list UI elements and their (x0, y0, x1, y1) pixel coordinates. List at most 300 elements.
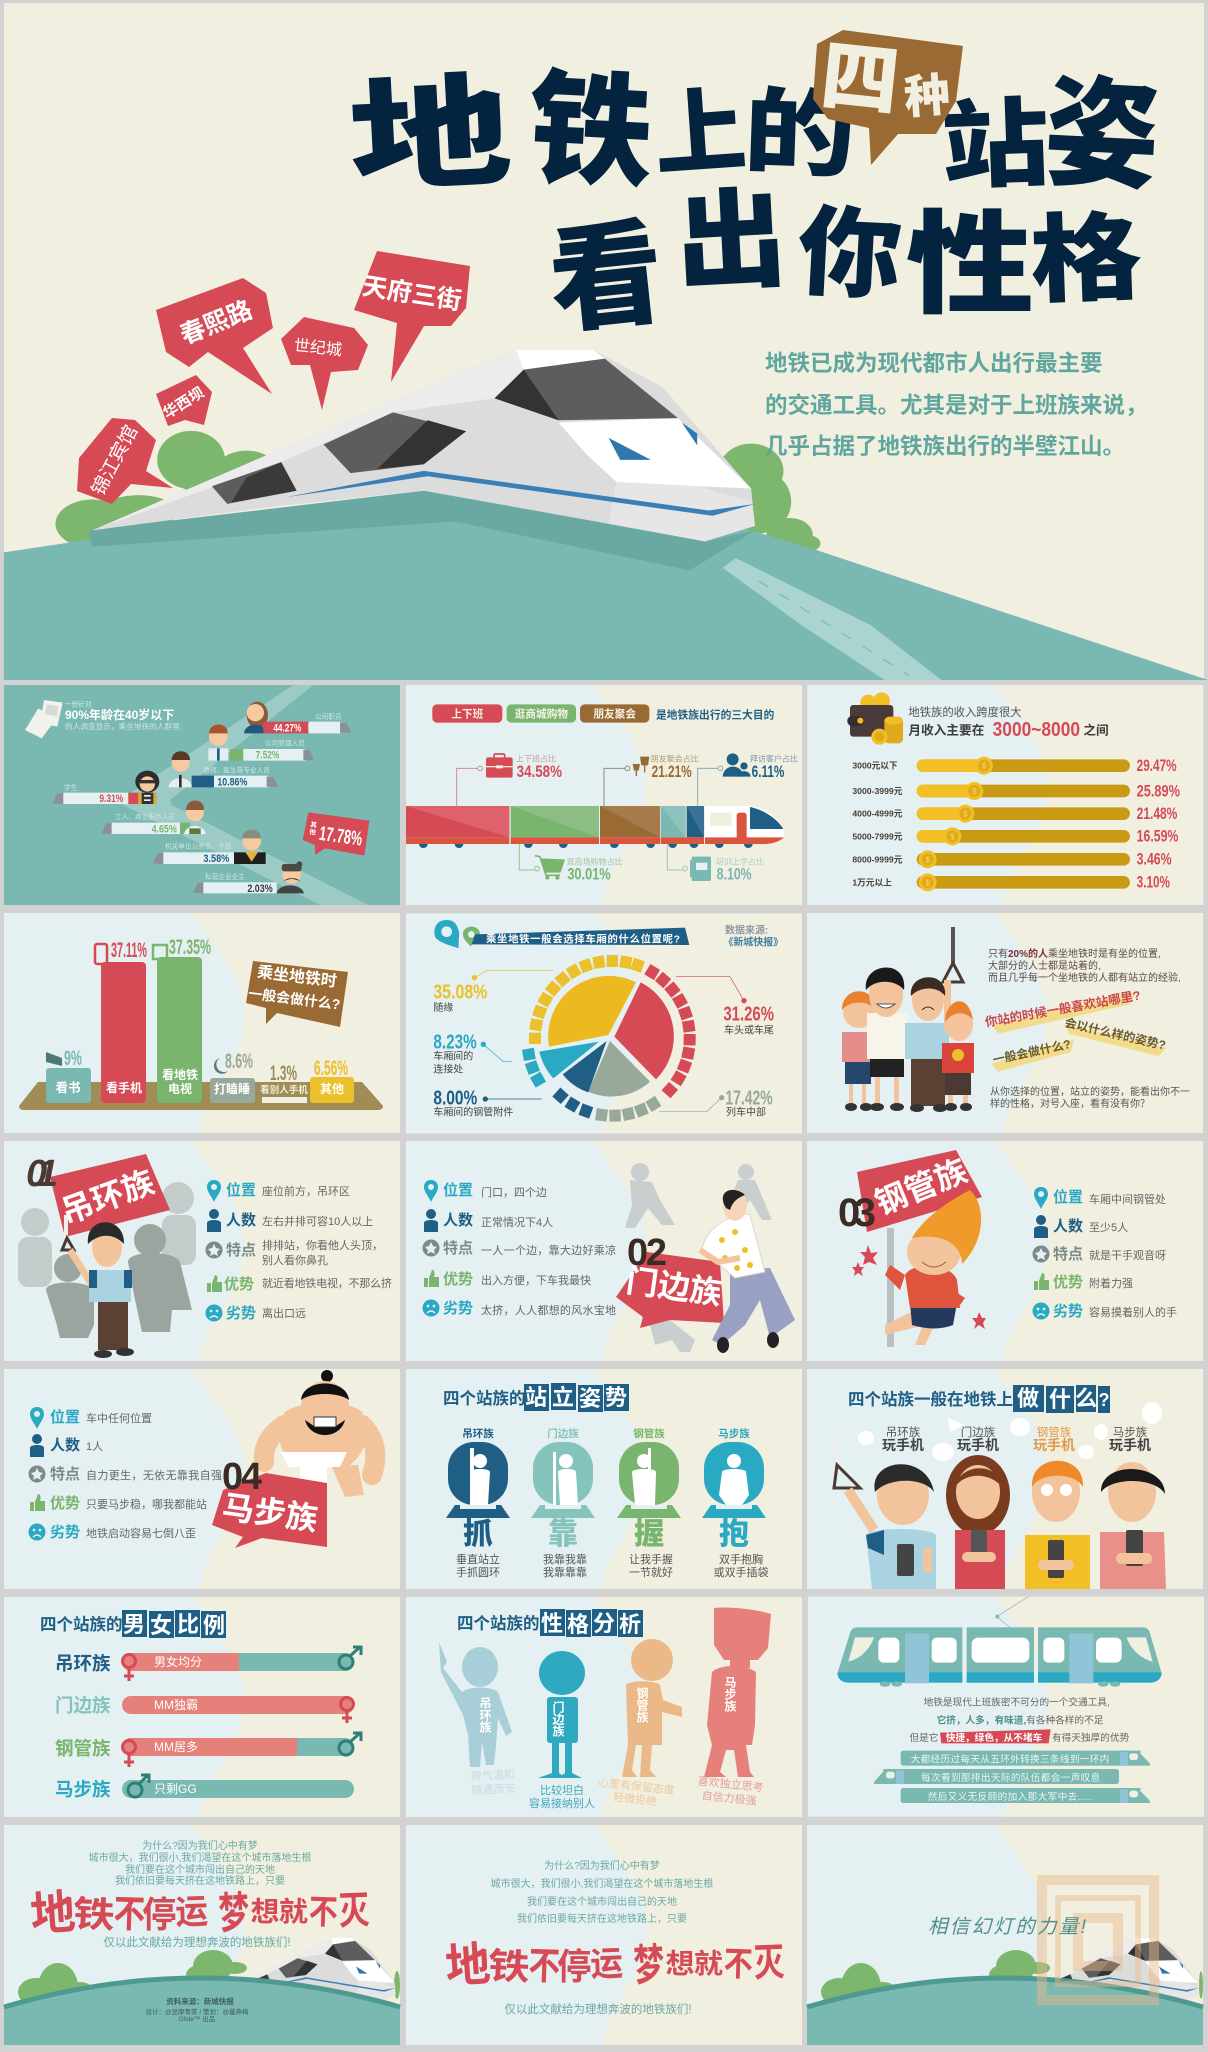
man holding strap (62, 1215, 134, 1358)
info: 劣势: 离出口远 (262, 1306, 306, 1320)
gray silhouettes (625, 1163, 772, 1352)
heading: 格 (567, 1612, 589, 1637)
bar: 其他: 其他 (320, 1081, 344, 1096)
info: 特点: 排排站，你看他人头顶， (262, 1238, 383, 1252)
stat: 培训上学: 培训上学占比 (716, 856, 764, 866)
callout: 乘坐地铁时: 乘坐地铁时 (256, 963, 338, 991)
slogan: 地 (28, 1875, 77, 1945)
row: 工人、商业服务人员: 工人、商业服务人员 (115, 812, 175, 821)
info: 优势 (207, 1275, 392, 1293)
bubble: 华西坝 (156, 375, 212, 426)
slogan: 就 (279, 1890, 308, 1930)
boy on pole (885, 1190, 981, 1345)
slogan: 梦 (217, 1877, 251, 1942)
callout: 乘坐地铁时: 一般会做什么? (247, 985, 341, 1012)
stat: 培训上学: 8.10% (717, 864, 752, 883)
verse text: 为什么?因为我们心中有梦 (544, 1859, 660, 1872)
title: 格 (1027, 180, 1144, 323)
info: 人数 (30, 1434, 103, 1457)
info: 位置 (207, 1180, 350, 1202)
info: 优势: 优势 (1053, 1274, 1083, 1291)
label: 连接处 (433, 1032, 512, 1076)
bar: 看地铁电视: 看地铁 (162, 1067, 198, 1082)
bar: 看地铁电视: 37.35% (169, 936, 211, 959)
info: 人数: 人数 (50, 1437, 80, 1454)
title: 地 (344, 33, 515, 217)
row: 学生: 学生 (64, 783, 78, 792)
summary text: 有得天独厚的优势 (1052, 1732, 1130, 1744)
silhouette: 门边族 (538, 1651, 585, 1778)
bar: 看书: 9% (64, 1047, 82, 1070)
heading: 地铁族的收入跨度很大 (908, 705, 1022, 719)
callout: 其他 17.78%: 其 (310, 822, 317, 830)
panel: standing postures (406, 1369, 802, 1589)
info: 劣势: 劣势 (443, 1300, 473, 1317)
heading pills: 逛商城购物 (515, 708, 568, 721)
info: 人数: 1人 (86, 1440, 103, 1453)
callout: 其他 17.78%: 17.78% (318, 823, 364, 851)
labels: 玩手机 (957, 1437, 999, 1453)
info: 优势: 优势 (443, 1271, 473, 1288)
bar: 5000-7999元: 5000-7999元 (852, 831, 903, 841)
heading: 立 (552, 1385, 574, 1410)
row: 公司职员: 公司职员 (315, 713, 342, 721)
panel: 吊环族 (4, 1141, 400, 1361)
bar: 看手机 (95, 939, 147, 1103)
intro text: 90%年龄在40岁以下 (65, 707, 174, 722)
gray crowd silhouettes (18, 1182, 196, 1338)
stat: 朋友聚会: 朋友聚会占比 (651, 754, 699, 764)
info: 位置: 车厢中间钢管处 (1089, 1192, 1166, 1206)
label: 连接处: 8.23% (433, 1032, 477, 1054)
bar: 1万元以上 (852, 873, 1170, 892)
heading: 么 (1075, 1386, 1097, 1411)
title (344, 27, 1164, 356)
mini train 3: 然后又义无反顾的加入那大军中去..... (928, 1791, 1092, 1803)
info: 特点: 就是干手观音呀 (1089, 1248, 1166, 1262)
tag: 马步族: 马步族 (220, 1488, 320, 1538)
info: 人数: 正常情况下4人 (481, 1216, 553, 1229)
tag: 钢管族: 03 (838, 1191, 876, 1235)
info: 劣势 (28, 1524, 196, 1541)
label: 钢管附件: 8.00% (433, 1087, 478, 1109)
info: 特点: 特点 (50, 1465, 80, 1483)
info: 优势: 优势 (224, 1276, 254, 1293)
person 4 (1100, 1462, 1166, 1589)
info: 位置: 位置 (50, 1408, 80, 1426)
column: 抱: 抱 (719, 1518, 749, 1551)
mini train 3 (901, 1788, 1150, 1803)
slogan: 想 (666, 1942, 694, 1982)
bar: 3000-3999元: $ (972, 787, 977, 796)
caption: 门边族: 比较坦白 (540, 1783, 584, 1797)
column: 靠: 我靠我靠 (543, 1552, 587, 1566)
icon: briefcase (486, 754, 513, 778)
column: 抓: 手抓圆环 (456, 1565, 500, 1579)
info list (422, 1180, 616, 1317)
bubble: 天府三街: 天府三街 (360, 272, 463, 316)
credits: 资料来源：新城快报 (166, 1996, 234, 2006)
data source (723, 923, 783, 949)
trees (821, 1950, 1203, 2011)
bar: 4000-4999元: 21.48% (1137, 805, 1178, 823)
tag: 吊环族: 01 (26, 1153, 58, 1195)
bar: 8000-9999元: 8000-9999元 (852, 854, 903, 864)
panel: income (807, 685, 1203, 905)
info: 特点: 特点 (443, 1239, 473, 1257)
heading pills: 朋友聚会 (593, 708, 636, 721)
verse text: 城市很大，我们很小,我们渴望在这个城市落地生根 (89, 1851, 311, 1864)
callout: 其他 17.78%: 他 (309, 827, 317, 837)
row: 门边族 (55, 1695, 354, 1723)
column: 抱 (702, 1427, 768, 1579)
panel: 钢管族 (807, 1141, 1203, 1361)
panel: 门边族 (406, 1141, 802, 1361)
heading (457, 1609, 643, 1637)
bar: 3000元以下: $ (982, 762, 987, 771)
labels (882, 1425, 1151, 1453)
column: 靠 (531, 1427, 595, 1579)
bar: 1万元以上: $ (925, 878, 930, 887)
verse text: 我们要在这个城市闯出自己的天地 (125, 1863, 275, 1876)
row: 钢管族: MM居多 (154, 1740, 198, 1754)
icon: notebook (690, 857, 711, 881)
heading: ? (1098, 1390, 1110, 1410)
label: 随缘 (433, 971, 553, 1014)
info: 特点 (422, 1239, 616, 1257)
panel: 马步族 (4, 1369, 400, 1589)
label: 随缘: 35.08% (433, 982, 488, 1004)
row: 钢管族 (55, 1733, 361, 1767)
slogan: 铁 (487, 1937, 531, 1991)
info: 优势 (424, 1270, 591, 1288)
row: 钢管族: 钢管族 (55, 1738, 111, 1759)
train (216, 1938, 396, 2000)
column: 抱: 马步族 (718, 1427, 750, 1440)
tag: 吊环族: 吊环族 (56, 1164, 159, 1230)
info list (206, 1180, 392, 1322)
heading: 四个站族一般在地铁上 (848, 1389, 1013, 1409)
column: 抓: 吊环族 (462, 1427, 494, 1440)
bubble: 世纪城: 世纪城 (293, 337, 343, 359)
info: 特点 (206, 1238, 383, 1267)
bar: 3000-3999元 (852, 782, 1180, 800)
bar: 打瞌睡: 8.6% (225, 1050, 253, 1073)
hero illustration: train on hill (4, 350, 1208, 680)
row: 马步族: 只剩GG (154, 1782, 197, 1796)
heading: 分 (593, 1611, 615, 1636)
column: 握: 握 (634, 1518, 664, 1551)
stat: 拜访客户 (750, 754, 798, 781)
info: 劣势 (1032, 1302, 1177, 1320)
info: 位置: 位置 (226, 1181, 256, 1199)
label: 列车中部 (659, 1088, 773, 1119)
caption: 吊环族: 脾气温和 (470, 1767, 515, 1783)
heading: 析 (619, 1612, 641, 1637)
tag: 马步族 (212, 1456, 327, 1548)
row: 马步族 (55, 1775, 354, 1800)
heading: 例 (203, 1613, 225, 1638)
heading: 四个站族的 (457, 1613, 540, 1633)
bubble: 春熙路 (156, 278, 273, 394)
column: 握: 钢管族 (633, 1427, 665, 1440)
bar: 8000-9999元 (852, 850, 1172, 869)
summary text: 但是它 (910, 1732, 938, 1744)
row: 公司管理人员: 7.52% (256, 750, 279, 762)
slogan: 不 (113, 1883, 146, 1940)
slogan: 不 (308, 1884, 339, 1935)
hill (4, 1978, 400, 2045)
label: 钢管附件: 车厢间的钢管附件 (433, 1105, 513, 1118)
info: 特点: 自力更生，无依无靠我自强 (86, 1468, 222, 1482)
bubble: 锦江宾馆 (77, 418, 173, 504)
text: intro: 大部分的人士都是站着的, (988, 959, 1101, 972)
label: 车头或车尾: 31.26% (723, 1003, 774, 1025)
info: 劣势: 劣势 (50, 1524, 80, 1541)
question: 姿势: 会以什么样的姿势? (1063, 1015, 1167, 1052)
labels: 门边族 (961, 1425, 996, 1439)
row: 门边族: 门边族 (55, 1695, 111, 1716)
pie chart (539, 976, 674, 1097)
slogan: 梦 (632, 1929, 666, 1994)
slogan: 运 (589, 1935, 624, 1986)
labels: 玩手机 (1033, 1437, 1075, 1453)
intro text (65, 700, 182, 731)
bubble: 天府三街 (354, 251, 470, 382)
row: 吊环族 (55, 1647, 361, 1681)
column: 抓: 垂直站立 (456, 1552, 500, 1566)
bar: 看别人手机: 1.3% (270, 1062, 297, 1085)
caption: 马步族: 自信力极强 (701, 1788, 757, 1808)
slogan (28, 1875, 370, 1945)
title: 看 (540, 180, 671, 356)
info: 位置 (424, 1180, 547, 1202)
info: 优势: 优势 (50, 1495, 80, 1512)
silhouette: 马步族 (704, 1607, 771, 1777)
hero intro text: 地铁已成为现代都市人出行最主要 (765, 350, 1103, 376)
stat: 上下班 (516, 754, 562, 781)
intro text: 的人调查显示，乘坐地铁的人群里: (65, 721, 182, 731)
labels: 吊环族 (886, 1425, 921, 1439)
panel: carriage position pie (406, 913, 802, 1133)
info: 优势 (1034, 1273, 1133, 1291)
text: closing: 从你选择的位置，站立的姿势，能看出你不一 (990, 1085, 1190, 1098)
info: 位置: 位置 (443, 1181, 473, 1199)
callout: 乘坐地铁时 (246, 961, 348, 1027)
icon: map pins (434, 920, 480, 948)
info: 位置: 门口，四个边 (481, 1185, 547, 1199)
bubble: 锦江宾馆: 锦江宾馆 (87, 422, 142, 499)
data source: 《新城快报》 (723, 936, 783, 949)
verse text: 我们依旧要每天挤在这地铁路上，只要 (115, 1874, 285, 1887)
row: 门边族: MM独霸 (154, 1698, 198, 1712)
slogan: 不 (723, 1936, 754, 1987)
column: 抓 (446, 1427, 510, 1579)
silhouette: 吊环族 (439, 1642, 512, 1767)
intro text: 一份针对 (65, 700, 92, 709)
tag: 吊环族 (26, 1153, 170, 1237)
title: 的 (742, 56, 859, 196)
person 3 orange hair (1025, 1461, 1090, 1589)
bubble: 四种: 种 (902, 68, 952, 124)
bar: 4000-4999元: 4000-4999元 (852, 809, 903, 819)
silhouette: 马步族: 马步族 (723, 1676, 737, 1713)
info: 劣势: 太挤，人人都想的风水宝地 (481, 1303, 616, 1317)
info: 特点: 特点 (1053, 1245, 1083, 1263)
label: 车头或车尾 (676, 977, 774, 1036)
info list (28, 1407, 222, 1541)
title: 姿 (1041, 34, 1164, 214)
title: 性 (906, 173, 1034, 336)
info: 劣势: 劣势 (226, 1305, 256, 1322)
heading: 男 (123, 1612, 145, 1637)
train (1019, 1938, 1199, 2000)
pantograph (996, 1597, 1028, 1627)
info: 劣势: 地铁启动容易七倒八歪 (86, 1526, 196, 1540)
bar: 看书: 看书 (55, 1080, 81, 1095)
info: 位置: 位置 (1053, 1188, 1083, 1206)
panel: hero (4, 3, 1208, 680)
info: 特点: 一人一个边，靠大边好乘凉 (481, 1243, 616, 1257)
summary text: 快捷，绿色，从不堵车 (946, 1732, 1043, 1744)
heading (40, 1610, 226, 1638)
info: 位置: 车中任何位置 (86, 1411, 152, 1425)
pole (887, 1228, 894, 1347)
row: 吊环族: 男女均分 (154, 1654, 202, 1669)
row: 私营企业业主: 2.03% (247, 883, 273, 895)
info: 人数: 左右并排可容10人以上 (262, 1214, 373, 1228)
heading: 四个站族的 (40, 1614, 122, 1634)
info: 优势: 只要马步稳，哪我都能站 (86, 1497, 207, 1511)
panel: standing people (807, 913, 1203, 1133)
label: 连接处: 连接处 (433, 1063, 463, 1076)
row: 公司职员 (244, 702, 352, 734)
labels: 马步族 (1113, 1425, 1148, 1439)
bar: 5000-7999元: $ (950, 832, 955, 841)
title: 上 (649, 56, 750, 195)
column: 抱: 或双手插袋 (714, 1565, 768, 1579)
slogan: 停 (142, 1886, 176, 1938)
heading banner: 乘坐地铁一般会选择车厢的什么位置呢? (486, 933, 680, 946)
panel: subway summary (808, 1597, 1204, 1817)
woman by door (700, 1189, 795, 1353)
bar: 其他: 6.56% (314, 1057, 348, 1080)
row: 私营企业业主: 私营企业业主 (205, 872, 245, 881)
row: 学生: 9.31% (99, 793, 123, 805)
slogan: 运 (174, 1883, 209, 1934)
heading: 之间 (1083, 722, 1109, 737)
text: intro: 而且几乎每一个坐地铁的人都有站立的经验, (988, 971, 1181, 984)
info: 劣势 (206, 1304, 306, 1322)
row: 工人、商业服务人员 (102, 800, 206, 835)
credits: 设计：@显摩青茶 / 策划：@量燕梅 (145, 2007, 249, 2016)
caption: 钢管族: 心里有保留态度 (597, 1775, 675, 1797)
info: 人数 (207, 1209, 373, 1232)
bar: 打瞌睡: 打瞌睡 (214, 1081, 250, 1096)
column: 抱: 双手抱胸 (719, 1552, 763, 1566)
bar: 其他 (310, 1057, 354, 1103)
heading: 姿 (579, 1386, 601, 1411)
hero intro text (765, 350, 1148, 459)
text: closing (990, 1085, 1190, 1110)
summary text (910, 1697, 1130, 1744)
icon: shopping cart (535, 856, 565, 880)
caption: 门边族 (529, 1783, 595, 1810)
bar: 看别人手机 (260, 1062, 308, 1103)
pie ring segments (522, 955, 696, 1122)
info: 人数: 人数 (226, 1212, 256, 1229)
caption: 钢管族: 轻微拒绝 (612, 1790, 658, 1808)
credits (145, 1996, 249, 2023)
info list (1032, 1187, 1177, 1320)
verse text (491, 1859, 713, 1925)
stat: 朋友聚会: 21.21% (652, 762, 692, 781)
bubble: 华西坝: 华西坝 (160, 383, 207, 422)
heading (443, 1383, 629, 1412)
stat: 逛商场购物 (567, 856, 623, 883)
labels: 钢管族 (1037, 1425, 1072, 1439)
heading: 比 (177, 1612, 199, 1637)
column: 靠: 门边族 (547, 1427, 579, 1440)
stat: 逛商场购物: 逛商场购物占比 (567, 856, 623, 866)
bar: 8000-9999元: $ (925, 855, 930, 864)
info: 劣势: 容易摸着别人的手 (1089, 1305, 1177, 1319)
slogan: 地 (443, 1927, 492, 1997)
heading: 四个站族的 (443, 1388, 526, 1408)
stat: 上下班: 34.58% (517, 762, 562, 781)
heading pills: 上下班 (451, 708, 484, 721)
label: 随缘: 随缘 (433, 1001, 453, 1014)
heading: 3000~8000 (993, 718, 1080, 741)
text: intro (988, 947, 1181, 984)
stat: 朋友聚会 (651, 754, 699, 781)
column: 握: 一节就好 (629, 1565, 673, 1579)
hero intro text: 几乎占据了地铁族出行的半壁江山。 (765, 434, 1125, 459)
row: 工人、商业服务人员: 4.65% (152, 823, 177, 835)
title: 铁 (525, 27, 658, 213)
label: 列车中部: 列车中部 (726, 1106, 766, 1119)
hill edge (4, 1978, 400, 2007)
stat: 培训上学 (716, 856, 764, 883)
info: 劣势: 劣势 (1053, 1303, 1083, 1320)
verse text (89, 1839, 311, 1887)
text: intro: 只有20%的人乘坐地铁时是有坐的位置, (988, 947, 1161, 960)
summary text: 地铁是现代上班族密不可分的一个交通工具, (924, 1697, 1110, 1709)
row: 公务员: 3.58% (203, 853, 229, 865)
bar: 4000-4999元 (852, 805, 1178, 823)
info: 优势: 附着力强 (1089, 1276, 1133, 1290)
heading: 站 (525, 1385, 547, 1410)
panel: closing with credits (4, 1825, 400, 2045)
connector lines (457, 766, 723, 871)
info: 人数 (424, 1209, 553, 1232)
heading: 月收入主要在 (908, 722, 984, 737)
hero intro text: 的交通工具。尤其是对于上班族来说， (765, 392, 1148, 418)
icon: wallet with coins (847, 692, 903, 745)
bar: 看手机: 看手机 (106, 1080, 142, 1095)
heading banner (472, 928, 689, 946)
labels: 玩手机 (1109, 1437, 1151, 1453)
stat: 拜访客户: 拜访客户占比 (750, 754, 798, 764)
info: 优势: 出入方便，下车我最快 (481, 1273, 591, 1287)
info: 特点: 别人看你鼻孔 (262, 1253, 328, 1267)
slogan: 相信幻灯的力量: 相信幻灯的力量! (928, 1916, 1087, 1938)
tag: 钢管族: 钢管族 (870, 1152, 972, 1222)
heading: 什 (1049, 1387, 1071, 1412)
bubble: 世纪城 (281, 317, 368, 410)
column: 握: 让我手握 (629, 1552, 673, 1566)
bar: 5000-7999元: 16.59% (1137, 828, 1179, 846)
